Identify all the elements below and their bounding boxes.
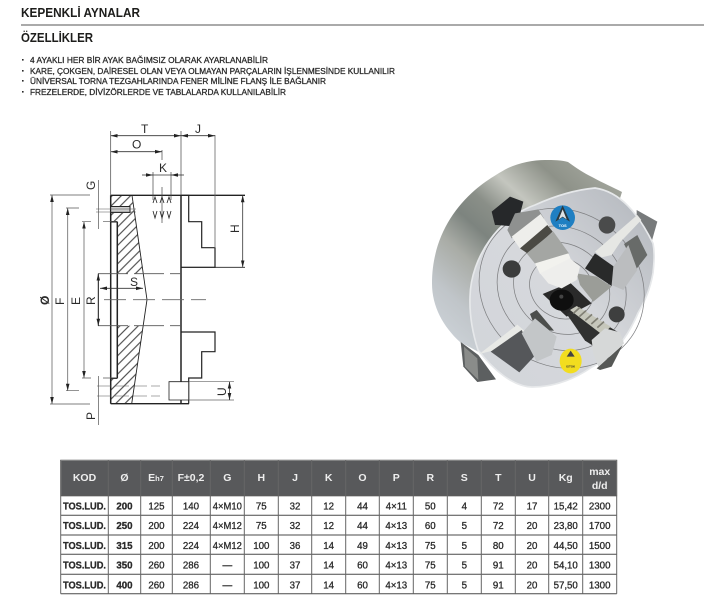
table row: 250: 23,80: [554, 521, 578, 532]
table row: 400: 286: [183, 580, 199, 592]
text block: feature list: FREZELERDE, DİVİZÖRLERDE VE TABLALARDA KULLANILABİLİR: [30, 87, 286, 97]
table row: 350: 60: [357, 560, 368, 572]
table header row: KOD: [73, 472, 97, 484]
dimension labels: K: [159, 161, 167, 175]
table row: 200: 17: [527, 502, 537, 512]
dimension labels: U: [215, 387, 229, 396]
table row: 400: 260: [148, 580, 165, 592]
logo: blue badge: TOS: [559, 223, 567, 228]
sticker: yellow: ISTOK: [566, 364, 576, 368]
text block: feature list: KARE, ÇOKGEN, DAİRESEL OLAN VEYA OLMAYAN PARÇALARIN İŞLENMESİNDE KULLANILIR: [30, 66, 395, 76]
table row: 250: 60: [425, 521, 436, 532]
dimension labels: [38, 122, 242, 420]
table row: 250: 5: [462, 521, 467, 532]
lower-right jaw with screw: [567, 306, 624, 370]
table row: 350: 37: [290, 560, 300, 572]
table row: 315: 4×13: [385, 541, 407, 552]
table grid: [61, 460, 617, 594]
table row: 315: TOS.LUD.: [63, 541, 106, 552]
table row: 400: 400: [116, 580, 133, 592]
table row: 400: 91: [493, 580, 504, 592]
title: KEPENKLİ AYNALAR: [21, 5, 140, 20]
table row: 250: 44: [357, 521, 368, 532]
table row: 200: 2300: [589, 502, 611, 512]
table row: 315: [63, 541, 611, 552]
table row: 200: 4: [462, 502, 468, 512]
table row: 250: [63, 521, 611, 532]
table row: 250: 200: [148, 521, 165, 532]
table row: 400: 14: [323, 580, 335, 592]
table header row: G: [223, 472, 231, 484]
table row: 400: 37: [290, 580, 300, 592]
dimension labels: G: [84, 181, 98, 190]
dimension labels: R: [84, 296, 98, 305]
table row: 350: 75: [425, 560, 436, 572]
table row: 200: 15,42: [554, 502, 578, 512]
table header row: U: [528, 472, 536, 484]
table row: 315: 5: [462, 541, 467, 552]
table header row: [61, 460, 617, 496]
table row: 350: 260: [148, 560, 165, 572]
table row: 350: [63, 560, 611, 572]
dimension labels: H: [228, 224, 242, 233]
dimension labels: J: [195, 122, 201, 136]
centre slot: [543, 283, 592, 317]
upper-left jaw: [492, 197, 580, 288]
heading: features: ÖZELLİKLER: [21, 30, 94, 45]
dimension labels: Ø: [38, 296, 52, 305]
table row: 200: 125: [148, 502, 165, 512]
table row: 315: 4×M12: [213, 541, 242, 552]
table row: 350: 20: [527, 560, 538, 572]
table row: 350: 91: [493, 560, 504, 572]
table row: 315: 36: [290, 541, 300, 552]
bore & centre lines: [98, 274, 181, 326]
table row: 200: 4×M10: [213, 502, 242, 512]
table row: 250: 32: [290, 521, 300, 532]
table row: 250: 1700: [589, 521, 611, 532]
teeth marks: [153, 197, 171, 218]
dimension lines: [52, 136, 243, 404]
table row: 315: 1500: [589, 541, 611, 552]
top screw: [111, 206, 130, 212]
table row: 400: 20: [527, 580, 538, 592]
dimension labels: S: [130, 275, 138, 289]
table row: 250: TOS.LUD.: [63, 521, 106, 532]
dimension labels: E: [69, 297, 83, 305]
technical drawing: chuck cross-section: [50, 131, 245, 425]
table row: 400: 75: [425, 580, 436, 592]
table row: 200: 140: [183, 502, 200, 512]
table row: 350: 14: [323, 560, 335, 572]
table row: 200: 4×11: [386, 502, 407, 512]
table header row: R: [427, 472, 435, 484]
table row: 400: 60: [357, 580, 368, 592]
table row: 200: 50: [425, 502, 436, 512]
table row: 250: 75: [256, 521, 267, 532]
table header row: P: [393, 472, 400, 484]
table row: 350: —: [222, 560, 232, 572]
table row: 200: 32: [290, 502, 300, 512]
table row: 200: TOS.LUD.: [63, 502, 106, 512]
table row: 250: 4×13: [385, 521, 407, 532]
table row: 315: 80: [493, 541, 504, 552]
table header row: d/d: [592, 480, 608, 492]
table header row: T: [495, 472, 502, 484]
text block: feature list: ÜNİVERSAL TORNA TEZGAHLARINDA FENER MİLİNE FLANŞ İLE BAĞLANIR: [30, 76, 326, 86]
sticker: yellow: [560, 349, 582, 373]
table row: 315: 20: [527, 541, 538, 552]
table row: 400: —: [222, 580, 232, 592]
table header row: K: [325, 472, 333, 484]
table row: 350: 350: [116, 560, 133, 572]
text block: feature list: 4 AYAKLI HER BİR AYAK BAĞIMSIZ OLARAK AYARLANABİLİR: [30, 55, 268, 65]
dimension labels: F: [53, 298, 67, 305]
table header row: H: [258, 472, 265, 484]
photo: four-jaw chuck: [432, 160, 676, 400]
table row: 200: 75: [256, 502, 267, 512]
table header row: O: [358, 472, 367, 484]
dimension labels: P: [84, 412, 98, 420]
table row: 200: 72: [493, 502, 504, 512]
table row: 315: 100: [253, 541, 270, 552]
table row: 350: 100: [253, 560, 270, 572]
table header row: F±0,2: [178, 472, 205, 484]
specification table: [61, 460, 617, 594]
table row: 400: 100: [253, 580, 270, 592]
table header row: Kg: [559, 472, 573, 484]
table row: 200: 200: [116, 502, 133, 512]
table row: 315: 44,50: [554, 541, 578, 552]
table row: 400: [63, 580, 611, 592]
table row: 315: 49: [357, 541, 368, 552]
bottom jaw: [181, 332, 215, 404]
table row: 315: 315: [116, 541, 133, 552]
table row: 315: 14: [323, 541, 335, 552]
hatched section: [111, 195, 143, 274]
table header row: Ø: [120, 472, 129, 484]
bolt: [169, 382, 189, 400]
table row: 250: 72: [493, 521, 504, 532]
table row: 400: TOS.LUD.: [63, 580, 106, 592]
table row: 315: 200: [148, 541, 165, 552]
text block: feature list: [22, 55, 395, 97]
table row: 250: 12: [323, 521, 334, 532]
logo: blue badge: [550, 205, 575, 230]
table row: 400: 4×13: [385, 580, 407, 592]
lower-left jaw: [479, 310, 557, 372]
table row: 250: 224: [183, 521, 200, 532]
table row: 200: 44: [357, 502, 368, 512]
dimension labels: O: [132, 138, 141, 152]
table row: 350: 54,10: [554, 560, 578, 572]
table row: 400: 57,50: [554, 580, 578, 592]
table row: 350: TOS.LUD.: [63, 560, 106, 572]
table row: 350: 286: [183, 560, 199, 572]
concentric rings: [448, 176, 676, 400]
upper-right jaw: [585, 215, 647, 290]
table row: 250: 250: [116, 521, 133, 532]
table row: 200: 12: [323, 502, 334, 512]
chuck body: [432, 160, 622, 352]
dimension labels: T: [141, 122, 149, 136]
table row: 250: 4×M12: [213, 521, 242, 532]
top jaw: [181, 195, 215, 267]
table row: 400: 1300: [589, 580, 611, 592]
table row: 315: 224: [183, 541, 200, 552]
chuck face: [470, 188, 654, 387]
table row: 350: 5: [462, 560, 467, 572]
table row: 315: 75: [425, 541, 436, 552]
table header row: S: [461, 472, 468, 484]
table row: 250: 20: [527, 521, 538, 532]
table header row: max: [589, 466, 610, 478]
table header row: J: [292, 472, 298, 484]
extension lines: [111, 131, 181, 223]
table header row: Eh7: [148, 472, 164, 484]
mounting holes: [503, 260, 521, 278]
table row: 350: 4×13: [385, 560, 407, 572]
table row: 200: [63, 502, 611, 512]
table row: 400: 5: [462, 580, 467, 592]
rear feet: [461, 342, 496, 382]
table row: 350: 1300: [589, 560, 611, 572]
